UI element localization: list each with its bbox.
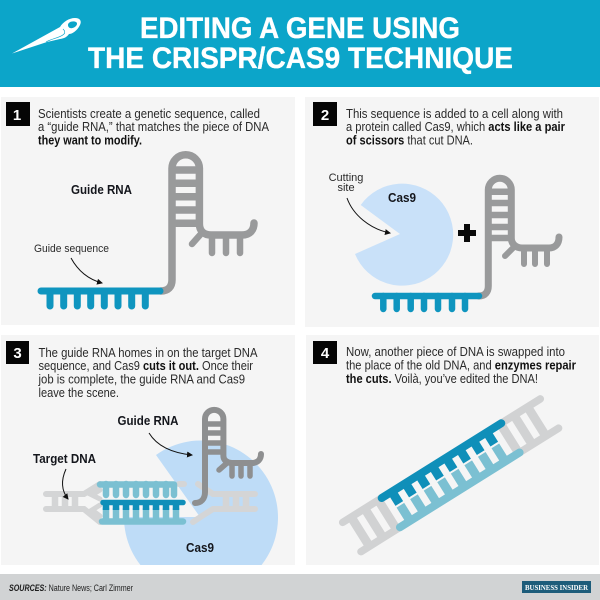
step number 2: 2 bbox=[321, 107, 329, 124]
panel: step 1 bbox=[1, 97, 295, 325]
label: Cutting site: Cutting bbox=[329, 172, 363, 184]
sources: SOURCES: Nature News; Carl Zimmer bbox=[9, 583, 133, 593]
target DNA right grey bbox=[179, 484, 255, 522]
step number 4: 4 bbox=[321, 345, 330, 362]
step 2 text bbox=[346, 107, 565, 148]
arrow: guide sequence bbox=[71, 258, 102, 283]
step 4 text: Now, another piece of DNA is swapped into bbox=[346, 345, 565, 359]
arrow: guide RNA bbox=[149, 433, 192, 455]
label: Guide RNA: Guide RNA bbox=[118, 414, 178, 428]
Cas9 pac-man shape bbox=[355, 184, 453, 286]
step 2 text: This sequence is added to a cell along with bbox=[346, 107, 563, 121]
step 3 text: sequence, and Cas9 cuts it out. Once their bbox=[38, 359, 253, 373]
step number 1 bbox=[6, 102, 30, 126]
guide RNA hairpin bbox=[195, 410, 261, 503]
step 2 text: a protein called Cas9, which acts like a pair bbox=[346, 120, 565, 134]
label: Guide RNA: Guide RNA bbox=[71, 183, 132, 197]
step 3 text: leave the scene. bbox=[38, 386, 119, 400]
step 2 text: of scissors that cut DNA. bbox=[346, 134, 473, 148]
label: Target DNA: Target DNA bbox=[33, 452, 96, 466]
panel: step 3 bbox=[1, 335, 295, 565]
title: EDITING A GENE USING bbox=[140, 12, 460, 45]
panel: step 4 bbox=[306, 335, 599, 565]
title bbox=[88, 12, 513, 75]
header banner bbox=[0, 0, 600, 87]
label: Guide sequence: Guide sequence bbox=[34, 243, 109, 255]
footer bar bbox=[0, 574, 600, 600]
target DNA left grey bbox=[46, 484, 100, 522]
step number 3: 3 bbox=[13, 345, 22, 362]
guide RNA hairpin bbox=[479, 178, 559, 296]
step 1 text: Scientists create a genetic sequence, called bbox=[38, 107, 260, 121]
step 1 text: they want to modify. bbox=[38, 134, 142, 148]
label: Cas9: Cas9 bbox=[186, 541, 214, 555]
icon: plus bbox=[458, 224, 476, 242]
logo: Business Insider: BUSINESS INSIDER bbox=[525, 583, 589, 592]
title: THE CRISPR/CAS9 TECHNIQUE bbox=[88, 42, 513, 75]
guide RNA dark strand bbox=[103, 502, 183, 510]
step 3 text: The guide RNA homes in on the target DNA bbox=[38, 346, 258, 360]
step 3 text bbox=[38, 346, 258, 400]
panel: step 2 bbox=[305, 97, 599, 327]
step 3 text: job is complete, the guide RNA and Cas9 bbox=[38, 372, 245, 386]
guide sequence strand bbox=[375, 296, 479, 309]
step number 2 bbox=[313, 102, 337, 126]
step 1 text bbox=[38, 107, 270, 148]
guide sequence strand bbox=[41, 291, 160, 306]
edited DNA ladder bbox=[343, 399, 559, 552]
target DNA teal strands bbox=[100, 484, 183, 522]
step 4 text: the cuts. Voilà, you’ve edited the DNA! bbox=[346, 372, 538, 386]
label: Cutting site: site bbox=[337, 182, 355, 194]
icon: scissors bbox=[12, 18, 81, 54]
step 4 text: the place of the old DNA, and enzymes repair bbox=[346, 358, 576, 372]
step number 4 bbox=[313, 341, 337, 364]
label: Cutting site bbox=[329, 172, 363, 194]
step number 1: 1 bbox=[13, 107, 21, 124]
arrow: cutting site bbox=[347, 198, 390, 233]
label: Cas9: Cas9 bbox=[388, 191, 416, 205]
step number 3 bbox=[6, 341, 29, 364]
step 1 text: a “guide RNA,” that matches the piece of DNA bbox=[38, 120, 270, 134]
arrow: target DNA bbox=[62, 469, 68, 499]
Cas9 circle bbox=[124, 440, 278, 565]
step 4 text bbox=[346, 345, 576, 386]
guide RNA hairpin bbox=[161, 155, 254, 291]
logo: Business Insider bbox=[522, 581, 591, 593]
